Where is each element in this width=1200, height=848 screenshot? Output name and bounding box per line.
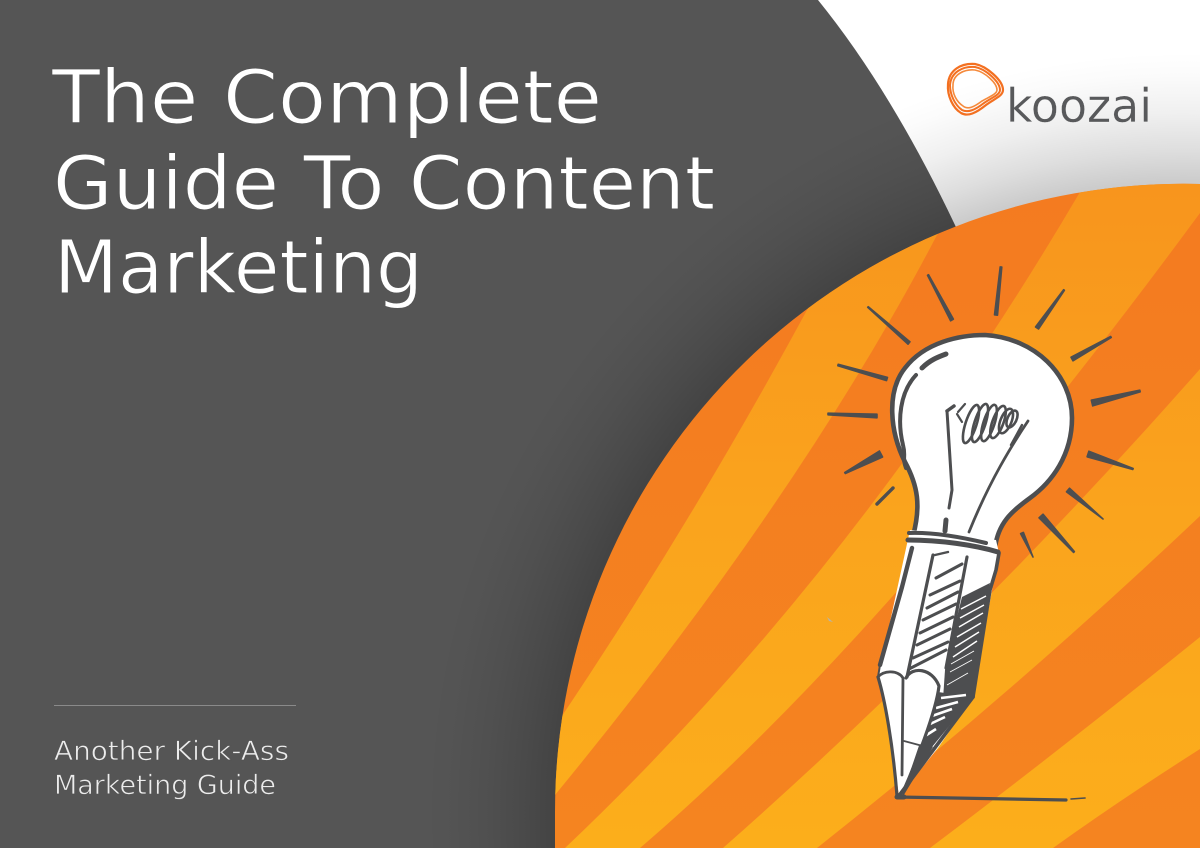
filament	[945, 402, 1028, 532]
icon: orange swirl	[948, 64, 1003, 115]
pencil outline	[878, 548, 999, 797]
bulb highlights	[900, 354, 946, 468]
title	[51, 55, 715, 311]
light rays	[828, 267, 1140, 557]
bulb glass	[892, 335, 1072, 548]
shaded side highlights	[947, 596, 986, 685]
wordmark: koozai	[1006, 79, 1152, 133]
title: The Complete	[51, 55, 602, 141]
pencil body	[878, 530, 999, 796]
logo: koozai	[948, 64, 1152, 133]
pencil tip	[878, 670, 973, 795]
illustration: light bulb pencil	[828, 267, 1140, 800]
title: Guide To Content	[53, 141, 715, 227]
orange circle with stripes	[540, 170, 1200, 848]
bulb collar	[908, 533, 998, 552]
title: Marketing	[54, 225, 423, 311]
pencil stripe hatching	[907, 552, 967, 677]
drawn line	[897, 797, 1085, 800]
subtitle: Another Kick-Ass	[54, 736, 289, 767]
subtitle	[54, 736, 289, 801]
divider	[54, 705, 296, 706]
subtitle: Marketing Guide	[54, 770, 276, 801]
pencil shaded side	[942, 583, 990, 714]
speck	[827, 617, 833, 622]
